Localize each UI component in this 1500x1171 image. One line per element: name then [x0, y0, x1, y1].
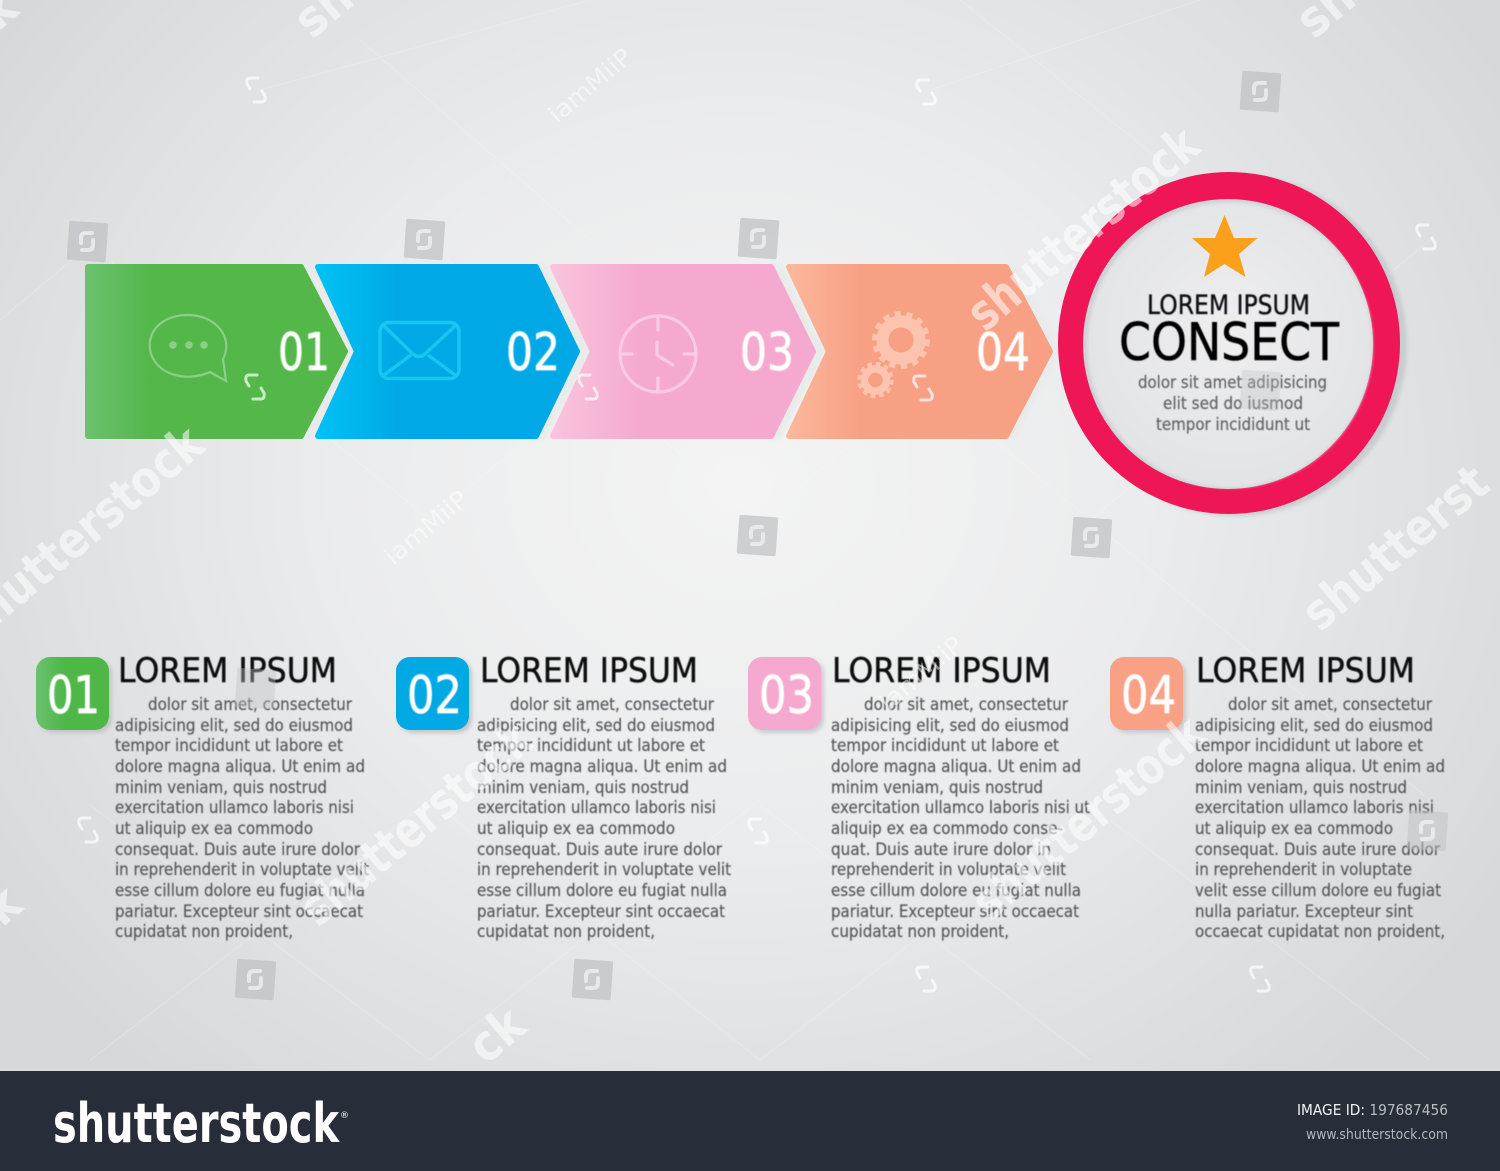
body text 02: tempor incididunt ut labore et: [477, 736, 705, 755]
body text 03: tempor incididunt ut labore et: [831, 736, 1059, 755]
badge 03: 03: [759, 666, 814, 726]
body text 02: [477, 695, 731, 941]
watermark tiles: [67, 71, 1448, 1000]
body text 02: cupidatat non proident,: [477, 922, 655, 941]
badge 03: [748, 657, 824, 733]
number 03: 03: [740, 323, 794, 383]
body text 02: ut aliquip ex ea commodo: [477, 819, 675, 838]
callout text: tempor incididunt ut: [1156, 415, 1310, 435]
body text 03: reprehenderit in voluptate velit: [831, 860, 1066, 879]
body text 01: minim veniam, quis nostrud: [115, 778, 327, 797]
body text 04: occaecat cupidatat non proident,: [1195, 922, 1445, 941]
contributor watermarks: iamMiiP: [543, 43, 637, 129]
body text 03: dolore magna aliqua. Ut enim ad: [831, 757, 1081, 776]
body text 01: pariatur. Excepteur sint occaecat: [115, 902, 363, 921]
badge 04: 04: [1121, 666, 1176, 726]
body text 01: [115, 695, 369, 941]
body text 01: cupidatat non proident,: [115, 922, 293, 941]
callout title: CONSECT: [1119, 313, 1339, 373]
body text 03: [831, 695, 1090, 941]
body text 02: pariatur. Excepteur sint occaecat: [477, 902, 725, 921]
body text 03: aliquip ex ea commodo conse-: [831, 819, 1063, 838]
body text 04: dolore magna aliqua. Ut enim ad: [1195, 757, 1445, 776]
arrow 01: message: [88, 267, 345, 436]
icon: envelope: [380, 322, 459, 378]
number 02: 02: [506, 323, 560, 383]
image id: IMAGE ID: 197687456: [1297, 1101, 1448, 1119]
body text 03: esse cillum dolore eu fugiat nulla: [831, 881, 1081, 900]
process arrows: [88, 264, 1061, 439]
footer logo: shutterstock: [53, 1092, 340, 1155]
heading 02: LOREM IPSUM: [480, 651, 698, 691]
icon: star: [1192, 215, 1258, 277]
registered mark: ®: [340, 1111, 349, 1121]
circle callout: [1058, 172, 1407, 516]
body text 03: cupidatat non proident,: [831, 922, 1009, 941]
body text 04: [1195, 695, 1445, 941]
heading 03: LOREM IPSUM: [832, 651, 1051, 691]
body text 04: in reprehenderit in voluptate: [1195, 860, 1412, 879]
body text 04: adipisicing elit, sed do eiusmod: [1195, 716, 1433, 735]
heading 01: LOREM IPSUM: [118, 651, 337, 691]
badge 02: [396, 657, 472, 733]
watermark tile marks: [81, 83, 1433, 988]
body text 01: adipisicing elit, sed do eiusmod: [115, 716, 353, 735]
body text 03: exercitation ullamco laboris nisi ut: [831, 798, 1090, 817]
body text 01: exercitation ullamco laboris nisi: [115, 798, 354, 817]
body text 02: exercitation ullamco laboris nisi: [477, 798, 716, 817]
body text 01: consequat. Duis aute irure dolor: [115, 840, 360, 859]
body text 04: consequat. Duis aute irure dolor: [1195, 840, 1440, 859]
contributor watermarks: iamMiiP: [874, 631, 968, 717]
body text 01: ut aliquip ex ea commodo: [115, 819, 313, 838]
body text 02: adipisicing elit, sed do eiusmod: [477, 716, 715, 735]
body text 01: dolor sit amet, consectetur: [148, 695, 352, 714]
body text 02: in reprehenderit in voluptate velit: [477, 860, 731, 879]
callout heading: LOREM IPSUM: [1147, 290, 1310, 321]
body text 04: ut aliquip ex ea commodo: [1195, 819, 1393, 838]
badge 02: 02: [407, 666, 462, 726]
number 01: 01: [278, 323, 330, 383]
website: www.shutterstock.com: [1306, 1127, 1448, 1143]
column 02: [396, 651, 731, 941]
body text 03: quat. Duis aute irure dolor in: [831, 840, 1051, 859]
diagonal watermark wordmarks: ck: [456, 994, 538, 1075]
callout text: [1138, 373, 1327, 435]
callout text: dolor sit amet adipisicing: [1138, 373, 1327, 393]
body text 02: esse cillum dolore eu fugiat nulla: [477, 881, 727, 900]
badge 01: 01: [47, 666, 100, 726]
body text 01: in reprehenderit in voluptate velit: [115, 860, 369, 879]
body text 04: exercitation ullamco laboris nisi: [1195, 798, 1434, 817]
callout text: elit sed do iusmod: [1163, 394, 1303, 414]
arrow 03: time: [553, 267, 813, 436]
badge 01: [36, 657, 112, 733]
body text 01: esse cillum dolore eu fugiat nulla: [115, 881, 365, 900]
arrow 04: settings: [789, 267, 1050, 436]
body text 04: dolor sit amet, consectetur: [1228, 695, 1432, 714]
body text 03: adipisicing elit, sed do eiusmod: [831, 716, 1069, 735]
body text 03: minim veniam, quis nostrud: [831, 778, 1043, 797]
body text 04: nulla pariatur. Excepteur sint: [1195, 902, 1413, 921]
column 01: [36, 651, 369, 941]
body text 02: dolore magna aliqua. Ut enim ad: [477, 757, 727, 776]
diagonal watermark wordmarks: shutterstock: [288, 709, 544, 937]
contributor watermarks: iamMiiP: [379, 485, 473, 571]
column 04: [1110, 651, 1445, 941]
contributor watermarks: [379, 43, 968, 717]
body text 01: tempor incididunt ut labore et: [115, 736, 343, 755]
body text 02: consequat. Duis aute irure dolor: [477, 840, 722, 859]
body text 04: minim veniam, quis nostrud: [1195, 778, 1407, 797]
icon: speech bubble: [150, 315, 226, 381]
number 04: 04: [976, 323, 1030, 383]
column 03: [748, 651, 1090, 941]
body text 02: minim veniam, quis nostrud: [477, 778, 689, 797]
body text 03: pariatur. Excepteur sint occaecat: [831, 902, 1079, 921]
icon: clock: [620, 316, 696, 392]
small watermark marks: [79, 78, 1435, 991]
body text 04: velit esse cillum dolore eu fugiat: [1195, 881, 1441, 900]
diagonal watermark wordmarks: shutterstock: [960, 703, 1216, 931]
diagonal watermark wordmarks: shutterstock: [955, 114, 1211, 342]
body text 01: dolore magna aliqua. Ut enim ad: [115, 757, 365, 776]
arrow gap shadows: [300, 264, 1061, 439]
arrow 02: mail: [318, 267, 577, 436]
footer bar: [0, 1071, 1500, 1171]
badge 04: [1110, 657, 1186, 733]
icon: gears: [860, 314, 927, 396]
body text 03: dolor sit amet, consectetur: [864, 695, 1068, 714]
body text 02: dolor sit amet, consectetur: [510, 695, 714, 714]
heading 04: LOREM IPSUM: [1196, 651, 1415, 691]
body text 04: tempor incididunt ut labore et: [1195, 736, 1423, 755]
